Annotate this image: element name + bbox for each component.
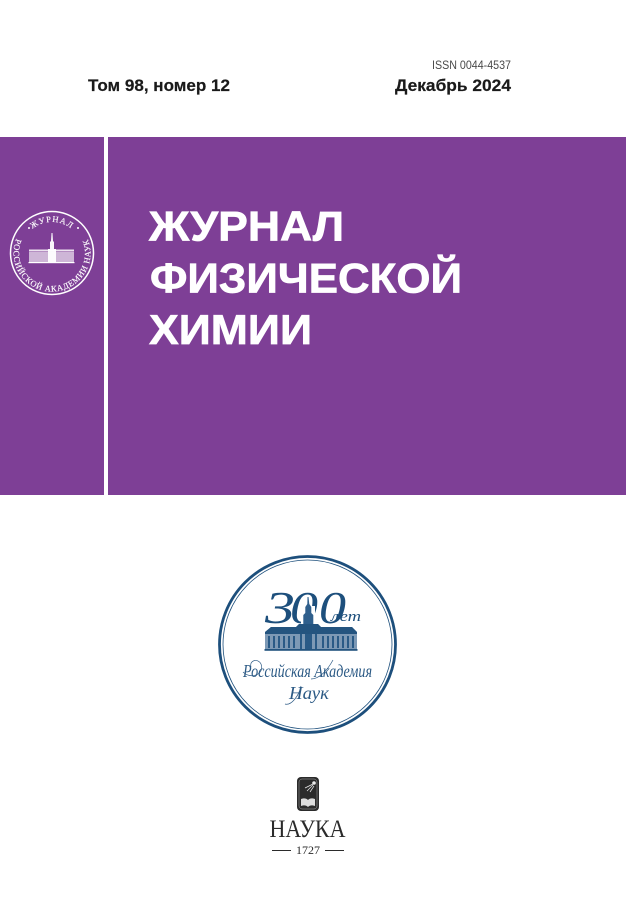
panel: purple title band bbox=[0, 137, 626, 495]
icon: 300 years Russian Academy of Sciences emblem bbox=[220, 556, 396, 732]
issue date: Декабрь 2024 bbox=[395, 76, 512, 95]
building illustration bbox=[264, 597, 358, 651]
publisher name: НАУКА bbox=[270, 816, 346, 843]
icon: journal seal: ЖУРНАЛ bbox=[30, 216, 74, 229]
anniversary text bbox=[264, 582, 361, 633]
anniversary text: 3 bbox=[264, 582, 295, 633]
founding year: 1727 bbox=[296, 845, 320, 857]
journal title: ХИМИИ bbox=[149, 306, 312, 353]
icon: journal seal bbox=[10, 210, 94, 296]
academy name: Российская Академия bbox=[242, 661, 372, 681]
academy name bbox=[242, 660, 372, 704]
journal title bbox=[148, 202, 462, 353]
anniversary text: 0 bbox=[290, 582, 318, 633]
academy name: Наук bbox=[288, 683, 330, 703]
anniversary text: 0 bbox=[319, 582, 346, 633]
icon: book and satellite bbox=[297, 777, 319, 811]
icon: journal seal: РОССИЙСКОЙ АКАДЕМИИ НАУК bbox=[13, 238, 91, 292]
logo: Nauka publisher bbox=[270, 777, 346, 857]
ISSN number: ISSN 0044-4537 bbox=[432, 58, 511, 72]
volume and issue: Том 98, номер 12 bbox=[88, 76, 230, 95]
anniversary text: лет bbox=[330, 609, 361, 625]
journal title: ЖУРНАЛ bbox=[148, 202, 344, 250]
journal title: ФИЗИЧЕСКОЙ bbox=[150, 254, 462, 302]
